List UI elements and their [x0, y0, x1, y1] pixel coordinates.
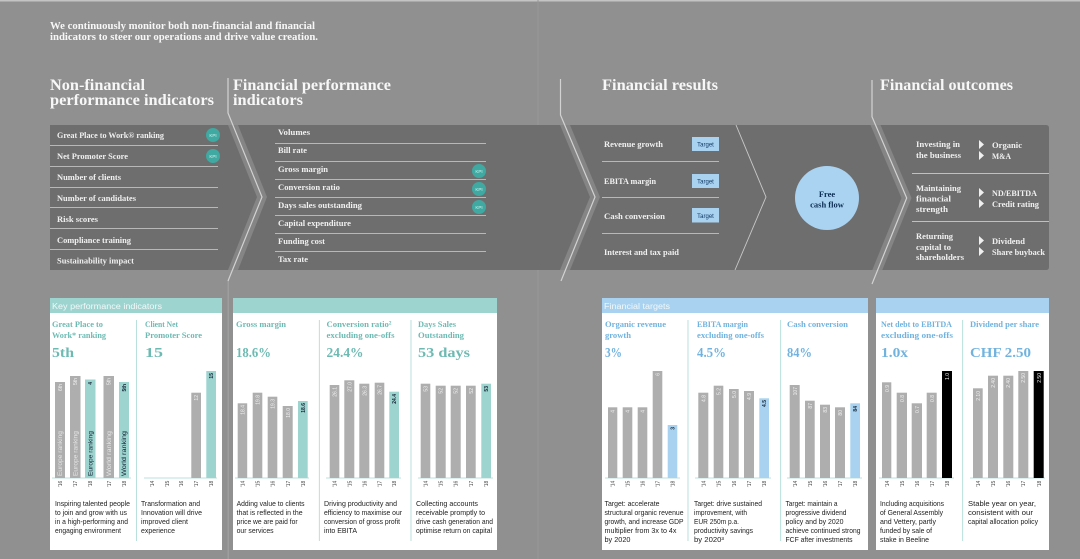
- panel: key performance indicators financial: 53 days: [418, 346, 471, 361]
- bar chart: EBITA margin: 5.2: [716, 388, 722, 395]
- panel: financial outcomes list: strength: [916, 204, 948, 214]
- description text: Including acquisitions: [880, 499, 944, 508]
- bar chart: client net promoter score: ’16: [179, 480, 185, 487]
- description text: into EBITA: [324, 526, 357, 535]
- bar chart: organic revenue growth: 4: [626, 410, 632, 413]
- bar chart: gross margin: ’14: [240, 480, 246, 487]
- description text: EUR 250m p.a.: [694, 517, 739, 526]
- panel: financial performance list: Volumes: [278, 127, 311, 137]
- panel: financial performance list: Conversion ratio: [278, 182, 340, 192]
- bar chart: net debt to EBITDA: 0.9: [885, 385, 891, 392]
- bar chart: dividend per share: 2.40: [991, 378, 997, 388]
- panel: financial outcomes list: [912, 139, 1049, 262]
- panel: financial performance list: Tax rate: [278, 254, 308, 264]
- bar chart: gross margin: 19.3: [270, 399, 276, 409]
- bar chart: net debt to EBITDA: ’15: [900, 480, 906, 487]
- panel: financial performance list: Funding cost: [278, 236, 325, 246]
- description text: structural organic revenue: [604, 508, 684, 517]
- panel: financial performance list: Gross margin: [278, 164, 328, 174]
- bar chart: gross margin: ’17: [286, 480, 292, 487]
- bar chart: conversion ratio: 24.4: [392, 394, 398, 404]
- panel: financial results list: Target: [697, 214, 714, 220]
- panel: key performance indicators non-financial: 15: [145, 346, 163, 361]
- description text: drive cash generation and: [416, 517, 493, 526]
- description text: consistent with our: [968, 508, 1034, 517]
- panel: financial outcomes list: the business: [916, 150, 962, 160]
- description text: conversion of gross profit: [324, 517, 401, 526]
- bar chart: conversion ratio: 26.3: [362, 386, 368, 396]
- panel: financial outcomes list: Maintaining: [916, 183, 962, 193]
- panel: financial targets: 4.5%: [697, 346, 726, 361]
- bar chart: cash conversion: ’17: [838, 480, 844, 487]
- panel: financial performance list: KPI: [475, 205, 483, 210]
- bar chart: EBITA margin: ’14: [702, 480, 708, 487]
- bar chart: organic revenue growth: ’14: [610, 480, 616, 487]
- panel: financial performance list: Days sales outstanding: [278, 200, 363, 210]
- description text: in a high-performing and: [55, 517, 128, 526]
- bar chart: dividend per share: 2.50: [1037, 373, 1043, 383]
- bar chart: conversion ratio: 27.0: [348, 382, 354, 392]
- bar chart: dividend per share: ’14: [976, 480, 982, 487]
- bar chart: net debt to EBITDA: 0.7: [915, 406, 921, 413]
- panel: financial targets outcomes: CHF 2.50: [970, 346, 1031, 361]
- description text: progressive dividend: [786, 508, 846, 517]
- panel: non-financial list: Number of clients: [57, 172, 122, 182]
- bar chart: gross margin: ’15: [256, 480, 262, 487]
- description text: to join and grow with us: [55, 508, 127, 517]
- panel: key performance indicators financial: Days Sales: [418, 319, 457, 329]
- bar chart: great place to work ranking: ’16: [58, 480, 64, 487]
- bar chart: net debt to EBITDA: ’16: [915, 480, 921, 487]
- panel: key performance indicators non-financial: Key performance indicators: [52, 302, 162, 311]
- panel: financial outcomes list: Share buyback: [992, 247, 1045, 257]
- bar chart: organic revenue growth: ’15: [626, 480, 632, 487]
- panel: non-financial list: KPI: [209, 154, 217, 159]
- bar chart: client net promoter score: 15: [209, 373, 215, 379]
- bar chart: great place to work ranking: ’18: [122, 480, 128, 487]
- heading: non-financial performance indicators: performance indicators: [50, 92, 214, 109]
- bar chart: gross margin: 19.8: [256, 395, 262, 405]
- panel: financial targets: EBITA margin: [697, 319, 748, 329]
- bar chart: EBITA margin: ’16: [732, 480, 738, 487]
- bar chart: net debt to EBITDA: ’18: [945, 480, 951, 487]
- free cash flow circle: cash flow: [810, 200, 845, 210]
- description text: funded by sale of: [880, 526, 933, 535]
- description text: [880, 499, 1038, 544]
- panel: financial outcomes list: Returning: [916, 231, 954, 241]
- bar chart: cash conversion: 84: [853, 406, 859, 412]
- description text: [604, 499, 860, 544]
- bar chart: great place to work ranking: 5th: [122, 384, 128, 392]
- bar chart: days sales outstanding: 52: [438, 388, 444, 394]
- panel: financial outcomes list: capital to: [916, 242, 951, 252]
- bar chart: days sales outstanding: ’16: [454, 480, 460, 487]
- panel: key performance indicators financial: Gross margin: [236, 319, 286, 329]
- description text: and Vettery, partly: [880, 517, 936, 526]
- panel: financial results list: EBITA margin: [604, 176, 656, 186]
- bar chart: conversion ratio: ’16: [362, 480, 368, 487]
- description text: capital allocation policy: [968, 517, 1038, 526]
- bar chart: EBITA margin: 4.8: [702, 395, 708, 402]
- bar chart: great place to work ranking: [52, 376, 131, 487]
- panel: financial results list: [602, 137, 719, 257]
- heading: financial outcomes: Financial outcomes: [880, 77, 1013, 94]
- heading: financial performance indicators: indicators: [233, 92, 303, 109]
- bar chart: conversion ratio: ’17: [378, 480, 384, 487]
- panel: key performance indicators non-financial: Work* ranking: [52, 330, 107, 340]
- panel: financial targets: 84%: [787, 346, 812, 361]
- panel: financial targets outcomes: excluding one-offs: [881, 330, 954, 340]
- panel: key performance indicators financial: excluding one-offs: [326, 330, 395, 340]
- bar chart: days sales outstanding: ’14: [424, 480, 430, 487]
- description text: productivity savings: [694, 526, 753, 535]
- bar chart: days sales outstanding: ’15: [438, 480, 444, 487]
- panel: financial outcomes list: M&A: [992, 151, 1012, 161]
- panel: financial outcomes list: Investing in: [916, 139, 960, 149]
- bar chart: great place to work ranking: World ranking: [122, 431, 128, 476]
- description text: our services: [237, 526, 274, 535]
- panel: financial targets outcomes: Dividend per share: [970, 319, 1039, 329]
- free cash flow circle: [795, 166, 859, 230]
- panel: non-financial list: KPI: [209, 133, 217, 138]
- panel: non-financial list: Number of candidates: [57, 193, 137, 203]
- description text: efficiency to maximise our: [324, 508, 402, 517]
- panel: key performance indicators non-financial: Great Place to: [52, 319, 103, 329]
- panel: key performance indicators financial: Outstanding: [418, 330, 465, 340]
- description text: Driving productivity and: [324, 499, 397, 508]
- bar chart: EBITA margin: 4.5: [762, 400, 768, 407]
- bar chart: conversion ratio: 26.7: [378, 385, 384, 395]
- bar chart: organic revenue growth: 4: [610, 410, 616, 413]
- description text: multiplier from 3x to 4x: [604, 526, 677, 535]
- bar chart: great place to work ranking: 5th: [106, 378, 112, 385]
- bar chart: gross margin: 18.0: [286, 408, 292, 418]
- panel: non-financial list: Compliance training: [57, 235, 132, 245]
- panel: key performance indicators financial: 24.4%: [326, 346, 364, 361]
- bar chart: cash conversion: ’16: [823, 480, 829, 487]
- description text: Transformation and: [141, 499, 200, 508]
- panel: financial outcomes list: Dividend: [992, 236, 1025, 246]
- panel: financial targets outcomes: [876, 298, 1049, 550]
- bar chart: great place to work ranking: Europe ranking: [74, 431, 80, 476]
- bar chart: gross margin: 18.6: [301, 403, 307, 413]
- bar chart: net debt to EBITDA: ’14: [885, 480, 891, 487]
- description text: of General Assembly: [880, 508, 943, 517]
- description text: Inspiring talented people: [55, 499, 130, 508]
- bar chart: cash conversion: 107: [793, 387, 799, 395]
- bar chart: client net promoter score: ’17: [194, 480, 200, 487]
- description text: improvement, with: [694, 508, 747, 517]
- bar chart: net debt to EBITDA: 0.8: [930, 395, 936, 402]
- panel: financial targets outcomes: 1.0x: [881, 346, 908, 361]
- description text: that is reflected in the: [237, 508, 303, 517]
- bar chart: client net promoter score: ’14: [150, 480, 156, 487]
- bar chart: organic revenue growth: 4: [640, 410, 646, 413]
- panel: financial targets: [602, 298, 868, 550]
- bar chart: dividend per share: ’17: [1021, 480, 1027, 487]
- bar chart: client net promoter score: ’15: [165, 480, 171, 487]
- bar chart: great place to work ranking: World ranking: [107, 431, 113, 476]
- bar chart: days sales outstanding: ’18: [484, 480, 490, 487]
- description text: Target: maintain a: [786, 499, 838, 508]
- description text: engaging environment: [55, 526, 122, 535]
- panel: financial targets: 3%: [605, 346, 622, 361]
- bar chart: EBITA margin: 5.0: [732, 391, 738, 398]
- panel: key performance indicators non-financial: [50, 298, 222, 550]
- description text: Adding value to clients: [237, 499, 305, 508]
- bar chart: cash conversion: 80: [838, 410, 844, 416]
- panel: financial outcomes list: ND/EBITDA: [992, 188, 1038, 198]
- panel: financial targets: Financial targets: [604, 302, 670, 311]
- bar chart: great place to work ranking: 5th: [73, 378, 79, 385]
- description text: FCF after investments: [786, 535, 853, 544]
- bar chart: days sales outstanding: 52: [469, 388, 475, 394]
- panel: non-financial list: Net Promoter Score: [57, 151, 128, 161]
- bar chart: conversion ratio: 26.1: [332, 387, 338, 397]
- panel: financial results list: Revenue growth: [604, 139, 663, 149]
- bar chart: organic revenue growth: ’18: [670, 480, 676, 487]
- panel: financial outcomes list: financial: [916, 194, 952, 204]
- bar chart: great place to work ranking: ’17: [73, 480, 79, 487]
- description text: Stable year on year,: [968, 499, 1036, 508]
- free cash flow circle: Free: [819, 189, 835, 199]
- bar chart: cash conversion: 87: [808, 403, 814, 409]
- bar chart: net debt to EBITDA: 1.0: [945, 373, 951, 380]
- bar chart: days sales outstanding: 52: [454, 388, 460, 394]
- bar chart: net debt to EBITDA: ’17: [930, 480, 936, 487]
- bar chart: client net promoter score: 12: [194, 395, 200, 401]
- intro text: indicators to steer our operations and drive value creation.: [50, 32, 319, 43]
- bar chart: days sales outstanding: 53: [424, 386, 430, 392]
- bar chart: dividend per share: 2.40: [1006, 378, 1012, 388]
- bar chart: dividend per share: ’15: [991, 480, 997, 487]
- panel: key performance indicators financial: 18.6%: [236, 346, 271, 361]
- panel: non-financial list: Sustainability impact: [57, 256, 134, 266]
- description text: by 2020: [604, 535, 630, 544]
- panel: financial performance list: KPI: [475, 187, 483, 192]
- description text: stake in Beeline: [880, 535, 929, 544]
- bar chart: gross margin: 18.4: [240, 405, 246, 415]
- bar chart: conversion ratio: ’18: [392, 480, 398, 487]
- bar chart: great place to work ranking: ’18: [88, 480, 94, 487]
- panel: financial targets: excluding one-offs: [697, 330, 765, 340]
- panel: key performance indicators financial: [233, 298, 497, 550]
- bar chart: gross margin: ’18: [301, 480, 307, 487]
- heading: non-financial performance indicators: Non-financial: [50, 77, 146, 94]
- description text: achieve continued strong: [786, 526, 860, 535]
- description text: price we are paid for: [237, 517, 298, 526]
- description text: [237, 499, 493, 535]
- description text: optimise return on capital: [416, 526, 492, 535]
- panel: financial targets: growth: [605, 330, 631, 340]
- description text: receivable promptly to: [416, 508, 485, 517]
- description text: policy and by 2020: [786, 517, 844, 526]
- description text: experience: [141, 526, 175, 535]
- bar chart: great place to work ranking: 4: [88, 382, 94, 385]
- panel: financial performance list: [275, 127, 486, 264]
- panel: key performance indicators non-financial: Client Net: [145, 319, 178, 329]
- heading: non-financial performance indicators: [50, 77, 214, 109]
- bar chart: conversion ratio: ’15: [348, 480, 354, 487]
- description text: [55, 499, 202, 535]
- bar chart: cash conversion: ’18: [853, 480, 859, 487]
- panel: financial results list: Interest and tax paid: [604, 247, 679, 257]
- bar chart: gross margin: ’16: [270, 480, 276, 487]
- panel: financial performance list: Bill rate: [278, 145, 307, 155]
- bar chart: client net promoter score: [144, 371, 217, 487]
- bar chart: EBITA margin: ’15: [716, 480, 722, 487]
- bar chart: cash conversion: [787, 385, 862, 487]
- chevron flow background: [50, 78, 1049, 284]
- bar chart: great place to work ranking: Europe ranking: [88, 431, 94, 476]
- bar chart: organic revenue growth: 6: [656, 373, 662, 376]
- bar chart: cash conversion: ’14: [793, 480, 799, 487]
- panel: financial outcomes list: Organic: [992, 140, 1022, 150]
- heading: financial performance indicators: [233, 77, 391, 109]
- description text: Innovation will drive: [141, 508, 202, 517]
- panel: non-financial list: Risk scores: [57, 214, 99, 224]
- heading: financial performance indicators: Financial performance: [233, 77, 391, 94]
- panel: key performance indicators non-financial: Promoter Score: [145, 330, 202, 340]
- bar chart: EBITA margin: 4.9: [747, 393, 753, 400]
- panel: key performance indicators non-financial: 5th: [52, 346, 74, 361]
- panel: financial results list: Cash conversion: [604, 211, 665, 221]
- panel: financial performance list: Capital expenditure: [278, 218, 351, 228]
- panel: financial results list: Target: [697, 142, 714, 148]
- intro text: [50, 21, 319, 43]
- bar chart: cash conversion: 83: [823, 407, 829, 413]
- panel: financial performance list: KPI: [475, 169, 483, 174]
- bar chart: EBITA margin: ’18: [762, 480, 768, 487]
- bar chart: net debt to EBITDA: 0.8: [900, 395, 906, 402]
- bar chart: client net promoter score: ’18: [209, 480, 215, 487]
- bar chart: conversion ratio: [326, 380, 401, 487]
- panel: financial outcomes list: shareholders: [916, 252, 965, 262]
- panel: key performance indicators financial: Conversion ratio²: [326, 319, 392, 329]
- heading: financial results: Financial results: [602, 77, 718, 94]
- bar chart: gross margin: [235, 393, 309, 487]
- bar chart: dividend per share: ’16: [1006, 480, 1012, 487]
- bar chart: conversion ratio: ’14: [332, 480, 338, 487]
- bar chart: net debt to EBITDA: [879, 371, 954, 487]
- description text: Target: drive sustained: [694, 499, 762, 508]
- bar chart: days sales outstanding: ’17: [469, 480, 475, 487]
- bar chart: great place to work ranking: ’17: [107, 480, 113, 487]
- panel: financial targets: Organic revenue: [605, 319, 666, 329]
- panel: financial targets: Cash conversion: [787, 319, 848, 329]
- panel: financial results list: Target: [697, 180, 714, 186]
- bar chart: dividend per share: [970, 371, 1045, 487]
- description text: growth, and increase GDP: [604, 517, 684, 526]
- panel: non-financial list: [50, 128, 220, 266]
- panel: financial outcomes list: Credit rating: [992, 199, 1040, 209]
- bar chart: organic revenue growth: [605, 371, 680, 487]
- bar chart: organic revenue growth: 3: [670, 427, 676, 430]
- bar chart: great place to work ranking: 6th: [58, 384, 64, 391]
- panel: financial targets outcomes: Net debt to EBITDA: [881, 319, 953, 329]
- bar chart: great place to work ranking: Europe ranking: [58, 431, 64, 476]
- bar chart: EBITA margin: ’17: [747, 480, 753, 487]
- bar chart: days sales outstanding: 53: [484, 386, 490, 392]
- bar chart: dividend per share: 2.10: [976, 391, 982, 401]
- description text: Collecting accounts: [416, 499, 478, 508]
- bar chart: organic revenue growth: ’16: [640, 480, 646, 487]
- description text: Target: accelerate: [604, 499, 660, 508]
- intro text: We continuously monitor both non-financial and financial: [50, 21, 315, 32]
- panel: non-financial list: Great Place to Work® ranking: [57, 130, 165, 140]
- description text: by 2020³: [694, 535, 725, 544]
- bar chart: dividend per share: ’18: [1037, 480, 1043, 487]
- bar chart: dividend per share: 2.50: [1021, 373, 1027, 383]
- bar chart: EBITA margin: [695, 386, 771, 487]
- bar chart: cash conversion: ’15: [808, 480, 814, 487]
- bar chart: days sales outstanding: [418, 384, 493, 487]
- description text: improved client: [141, 517, 189, 526]
- bar chart: organic revenue growth: ’17: [656, 480, 662, 487]
